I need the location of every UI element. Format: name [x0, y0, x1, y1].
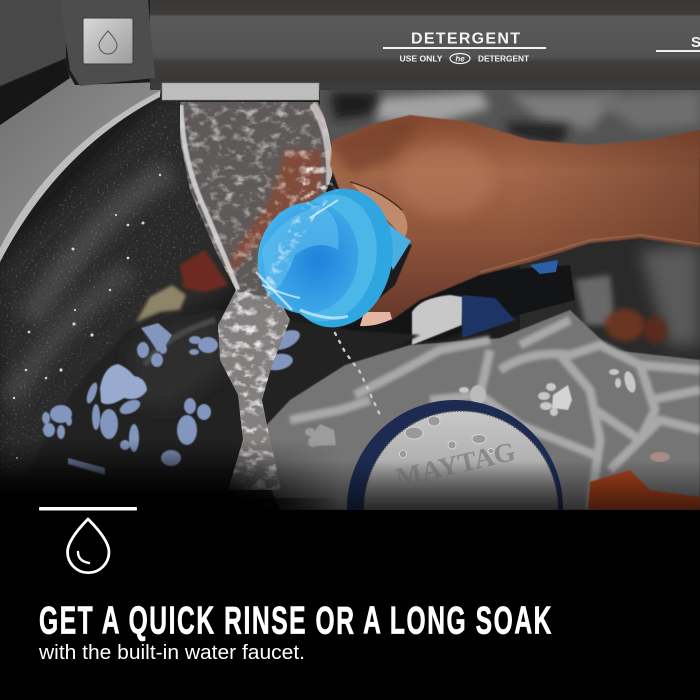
control panel	[150, 0, 700, 90]
falling water stream	[180, 102, 333, 490]
fingers behind cup	[350, 182, 408, 238]
paw prints	[42, 323, 303, 475]
lower right background clothing	[340, 235, 700, 365]
blue detergent cup	[255, 188, 411, 328]
maytag cap: MAYTAG	[393, 436, 518, 493]
dark wedge under top-left	[0, 60, 70, 125]
top-left dark surface	[0, 0, 66, 86]
cap droplets	[400, 416, 494, 458]
label: detergent: USE ONLY	[400, 54, 443, 64]
caption panel	[0, 507, 700, 700]
red and beige clothing	[136, 250, 228, 322]
hand and forearm	[330, 115, 700, 326]
upper right marbled clothing	[320, 88, 700, 158]
pale paw marks	[305, 369, 670, 462]
water dripping over cup	[262, 150, 380, 415]
label: detergent: DETERGENT	[478, 54, 529, 64]
label: detergent: DETERGENT	[411, 30, 520, 48]
machine rim	[0, 62, 162, 262]
accent rule	[39, 507, 137, 510]
orange cloth	[588, 470, 700, 510]
thumbnail	[360, 312, 392, 326]
faucet button	[83, 18, 133, 64]
photo: washer interior with water faucet	[0, 0, 700, 510]
bottom fade to black	[0, 440, 700, 510]
dark paw print cloth	[41, 310, 420, 476]
gray lattice paw cloth	[262, 310, 700, 510]
faucet spout bar	[162, 83, 319, 100]
button housing	[60, 0, 155, 86]
drum droplets	[13, 174, 161, 459]
label: detergent	[383, 30, 700, 64]
icon: water drop	[68, 519, 109, 573]
subheading: with the built-in water faucet.	[38, 642, 305, 664]
maytag cap	[347, 400, 563, 510]
icon: button water drop	[99, 31, 117, 54]
drum interior background	[0, 0, 700, 510]
label: detergent: he	[455, 54, 465, 64]
